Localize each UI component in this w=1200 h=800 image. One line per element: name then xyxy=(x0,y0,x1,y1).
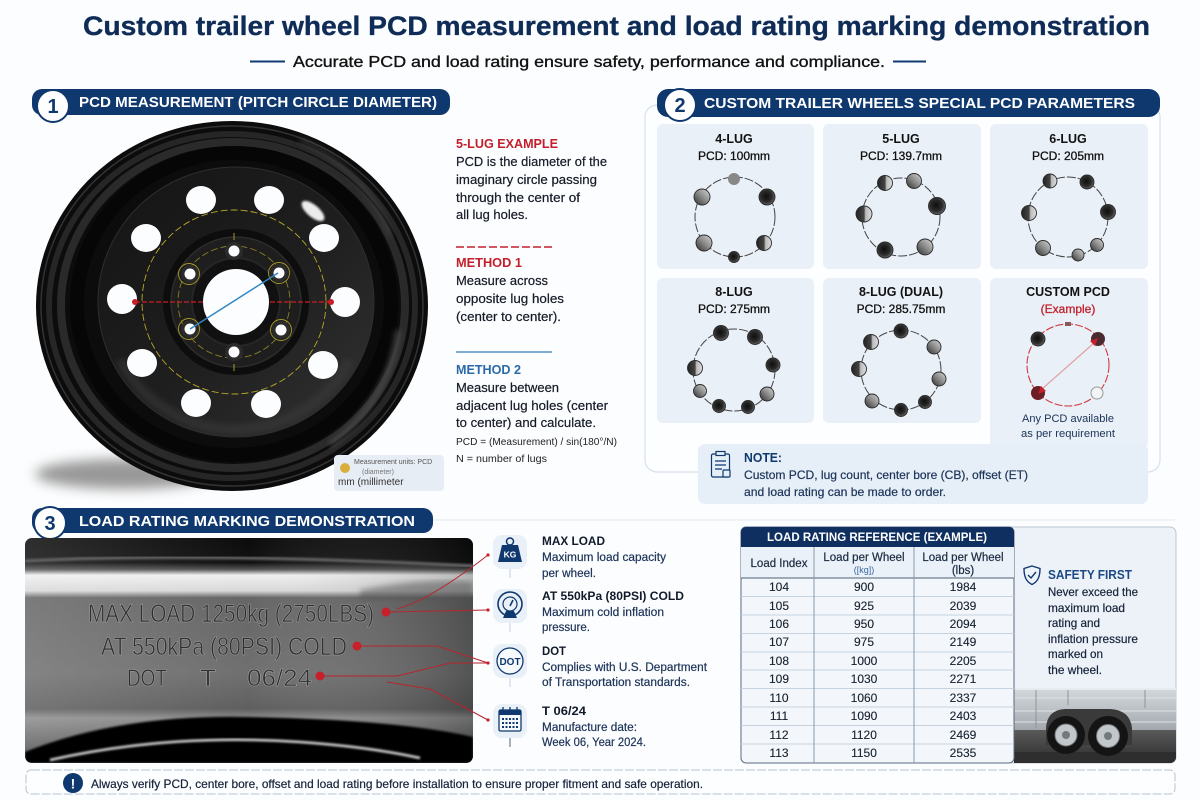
marking item: pressure: AT 550kPa (80PSI) COLD xyxy=(542,589,684,603)
marking item: date code: T 06/24 xyxy=(542,704,586,718)
table: load rating reference: 1030 xyxy=(851,672,878,686)
panel: safety first: maximum load xyxy=(1048,601,1125,615)
icon: shield xyxy=(1024,566,1040,584)
card: custom PCD: as per requirement xyxy=(1021,428,1115,440)
table: load rating reference xyxy=(741,527,1014,763)
table: load rating reference: 1000 xyxy=(851,654,878,668)
lug holes xyxy=(181,242,290,361)
card: custom PCD xyxy=(990,278,1148,448)
table: load rating reference: 2535 xyxy=(950,746,977,760)
panel: safety first: Never exceed the xyxy=(1048,585,1138,599)
wheel shadow xyxy=(35,459,215,489)
ventilation holes xyxy=(107,186,360,418)
table: load rating reference: 105 xyxy=(769,599,789,613)
card: custom PCD: (Example) xyxy=(1041,302,1095,316)
table: load rating reference: 109 xyxy=(769,672,789,686)
heading: section 1 xyxy=(32,89,450,122)
card: 8-lug dual: 8-LUG (DUAL) xyxy=(859,285,943,299)
card: 5-lug: PCD: 139.7mm xyxy=(860,149,942,163)
icon: DOT badge xyxy=(493,644,527,687)
panel: safety first: SAFETY FIRST xyxy=(1048,568,1132,582)
panel: safety first xyxy=(1010,527,1176,763)
card: 8-lug dual xyxy=(823,278,981,423)
table: load rating reference: 1984 xyxy=(950,580,977,594)
table: load rating reference: 2205 xyxy=(950,654,977,668)
card: custom PCD: Any PCD available xyxy=(1022,413,1114,425)
marking item: DOT xyxy=(493,644,708,689)
card: 6-lug: 6-LUG xyxy=(1049,132,1087,146)
card: 4-lug: PCD: 100mm xyxy=(698,149,770,163)
trailer wheels xyxy=(1046,709,1132,756)
card: custom PCD: CUSTOM PCD xyxy=(1026,285,1110,299)
heading: section 1: 1 xyxy=(47,96,59,118)
panel: safety first: marked on xyxy=(1048,647,1103,661)
card: 8-lug xyxy=(657,278,814,423)
text block: 5-lug example xyxy=(456,137,607,222)
wheel note label: Measurement units: PCD xyxy=(354,459,432,466)
callout: note: Custom PCD, lug count, center bore (CB), offset (ET) xyxy=(744,468,1028,482)
panel: special PCD parameters xyxy=(645,89,1160,504)
embossed text: MAX LOAD 1250kg (2750LBS) xyxy=(88,600,374,628)
card: 8-lug: PCD: 275mm xyxy=(698,302,770,316)
wheel note label: mm (millimeter xyxy=(338,477,404,488)
callout: note: NOTE: xyxy=(744,451,782,465)
embossed text: T xyxy=(200,665,216,692)
heading: section 2: 2 xyxy=(674,95,686,117)
marking item: DOT: of Transportation standards. xyxy=(542,677,690,689)
table: load rating reference: Load per Wheel xyxy=(823,552,905,564)
table: load rating reference: 1120 xyxy=(851,728,877,742)
text block: method 2: Measure between xyxy=(456,380,559,395)
table: load rating reference: (lbs) xyxy=(952,565,974,577)
icon: weight xyxy=(493,535,527,578)
table: load rating reference: 113 xyxy=(769,746,789,760)
marking item: DOT: Complies with U.S. Department xyxy=(542,662,708,674)
table: load rating reference: 2403 xyxy=(950,709,977,723)
text block: method 2: N = number of lugs xyxy=(456,453,547,465)
text block: method 2: METHOD 2 xyxy=(456,363,521,377)
table: load rating reference: 950 xyxy=(854,617,874,631)
center bore xyxy=(203,269,269,335)
marking item: date code: Week 06, Year 2024. xyxy=(542,737,646,749)
table: load rating reference: 2469 xyxy=(950,728,977,742)
text block: 5-lug example: all lug holes. xyxy=(456,207,528,222)
marking item: date code: Manufacture date: xyxy=(542,722,637,734)
marking item: max load: MAX LOAD xyxy=(542,534,605,548)
method 1 red line xyxy=(132,299,334,305)
heading: section 3: LOAD RATING MARKING DEMONSTRATION xyxy=(79,513,415,530)
panel: PCD measurement xyxy=(32,89,617,491)
heading: section 2 xyxy=(657,89,1160,121)
title: Custom trailer wheel PCD measurement and load rating marking demonstration xyxy=(83,11,1150,41)
marking item: date code xyxy=(493,704,646,749)
panel: safety first: the wheel. xyxy=(1048,663,1102,677)
heading: section 3: 3 xyxy=(44,513,56,535)
method 2 blue line xyxy=(190,273,278,329)
icon: clipboard xyxy=(712,452,730,477)
text block: method 2: adjacent lug holes (center xyxy=(456,398,609,413)
callout: note xyxy=(698,444,1148,504)
table: load rating reference: 1090 xyxy=(851,709,878,723)
callout: note: and load rating can be made to order. xyxy=(744,485,946,499)
table: load rating reference: 2094 xyxy=(950,617,977,631)
table: load rating reference: 925 xyxy=(854,599,874,613)
heading: section 2: CUSTOM TRAILER WHEELS SPECIAL PCD PARAMETERS xyxy=(704,95,1135,112)
footer warning xyxy=(26,770,1175,794)
photo: embossed wheel marking xyxy=(25,538,473,763)
embossed text: DOT xyxy=(127,665,167,692)
icon: gauge xyxy=(493,589,527,632)
text block: 5-lug example: imaginary circle passing xyxy=(456,172,597,187)
table: load rating reference: 104 xyxy=(769,580,789,594)
wheel diagram xyxy=(36,121,428,491)
table: load rating reference: 111 xyxy=(770,709,788,723)
card: 8-lug dual: PCD: 285.75mm xyxy=(857,302,945,316)
callout arrows xyxy=(316,553,490,722)
text block: method 1: (center to center). xyxy=(456,309,561,324)
subtitle: Accurate PCD and load rating ensure safety, performance and compliance. xyxy=(293,54,885,71)
card: 5-lug xyxy=(823,124,981,269)
embossed text xyxy=(90,604,373,686)
illustration: trailer xyxy=(1014,688,1176,763)
table: load rating reference: ([kg]) xyxy=(854,565,874,575)
text block: method 1: Measure across xyxy=(456,273,548,288)
wheel note label xyxy=(334,455,444,491)
text block: method 2: PCD = (Measurement) / sin(180°/N) xyxy=(456,436,617,448)
table: load rating reference: 900 xyxy=(854,580,874,594)
text block: method 1 xyxy=(456,256,565,324)
icon: calendar xyxy=(493,704,527,747)
table: load rating reference: 108 xyxy=(769,654,789,668)
marking item: max load: per wheel. xyxy=(542,568,596,580)
table: load rating reference: 107 xyxy=(769,635,789,649)
table: load rating reference: 106 xyxy=(769,617,789,631)
table: load rating reference: Load per Wheel xyxy=(922,552,1004,564)
text block: method 2 xyxy=(456,363,617,465)
marking item: max load xyxy=(493,534,666,580)
table: load rating reference: 2039 xyxy=(950,599,977,613)
card: 4-lug xyxy=(657,124,814,269)
panel: load rating marking xyxy=(25,507,1176,763)
card: 6-lug: PCD: 205mm xyxy=(1032,149,1104,163)
heading: section 3 xyxy=(32,507,433,539)
table: load rating reference: 110 xyxy=(769,691,789,705)
heading: section 1: PCD MEASUREMENT (PITCH CIRCLE DIAMETER) xyxy=(79,94,437,111)
table: load rating reference: 1150 xyxy=(851,746,877,760)
marking item: pressure xyxy=(493,589,684,634)
text block: method 2: to center) and calculate. xyxy=(456,415,596,430)
card: 4-lug: 4-LUG xyxy=(715,132,753,146)
card: 6-lug xyxy=(990,124,1148,269)
icon: DOT badge: DOT xyxy=(499,657,521,668)
card: 8-lug: 8-LUG xyxy=(715,285,753,299)
table: load rating reference: 2337 xyxy=(950,691,977,705)
table: load rating reference: 2149 xyxy=(950,635,977,649)
text block: 5-lug example: through the center of xyxy=(456,190,580,205)
pitch circles xyxy=(142,210,326,394)
panel: safety first: rating and xyxy=(1048,616,1100,630)
table: load rating reference: 112 xyxy=(769,728,789,742)
footer warning: Always verify PCD, center bore, offset and load rating before installation to ensure proper fitment and safe operation. xyxy=(91,777,703,791)
footer warning: ! xyxy=(71,776,75,792)
marking item: pressure: Maximum cold inflation xyxy=(542,607,664,619)
marking item: DOT: DOT xyxy=(542,644,567,658)
icon: weight: KG xyxy=(504,550,517,560)
card: 5-lug: 5-LUG xyxy=(882,132,920,146)
table: load rating reference: 2271 xyxy=(950,672,977,686)
text block: 5-lug example: 5-LUG EXAMPLE xyxy=(456,137,558,151)
text block: method 1: opposite lug holes xyxy=(456,291,565,306)
text block: 5-lug example: PCD is the diameter of the xyxy=(456,154,607,169)
table: load rating reference: 1060 xyxy=(851,691,878,705)
wheel note label: (diameter) xyxy=(362,469,394,476)
embossed text: AT 550kPa (80PSI) COLD xyxy=(101,633,347,661)
table: load rating reference: LOAD RATING REFERENCE (EXAMPLE) xyxy=(767,530,987,544)
table: load rating reference: Load Index xyxy=(751,558,808,570)
panel: safety first: inflation pressure xyxy=(1048,632,1138,646)
embossed text: 06/24 xyxy=(247,665,312,692)
marking item: pressure: pressure. xyxy=(542,622,590,634)
marking item: max load: Maximum load capacity xyxy=(542,552,666,564)
table: load rating reference: 975 xyxy=(854,635,874,649)
text block: method 1: METHOD 1 xyxy=(456,256,522,270)
